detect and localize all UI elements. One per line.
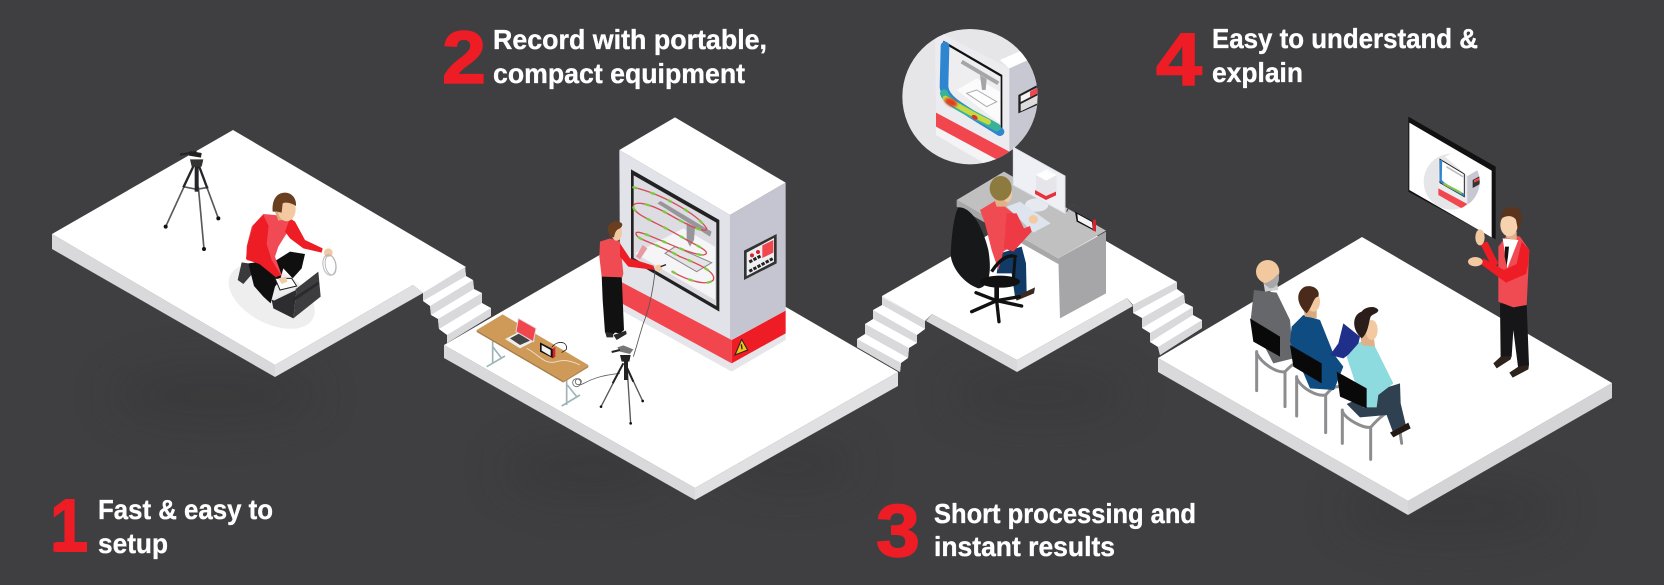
step 4 heading: explain xyxy=(1212,57,1303,88)
scene 2: recording the machine xyxy=(477,117,786,425)
audience member 3 xyxy=(1337,307,1411,459)
machine cabinet xyxy=(619,117,786,372)
platform 4 xyxy=(1158,237,1612,515)
platform 1 xyxy=(52,130,466,377)
step 2 heading: 2 xyxy=(442,16,486,99)
table with laptop and recorder xyxy=(477,314,588,406)
audience member 1 xyxy=(1250,260,1297,407)
cable coil xyxy=(321,254,338,276)
step 4 heading xyxy=(1156,18,1478,101)
thumbnail of result xyxy=(1424,154,1480,210)
desk xyxy=(957,172,1106,318)
cable xyxy=(633,272,655,357)
presenter xyxy=(1468,207,1529,378)
scene 3: processing at desk xyxy=(902,29,1106,322)
step 4 heading: Easy to understand & xyxy=(1212,23,1478,54)
step 3 heading: 3 xyxy=(876,489,920,572)
tripod with camera xyxy=(600,345,644,425)
step 2 heading: Record with portable, xyxy=(493,24,767,55)
figure shadow xyxy=(218,251,325,342)
step 1 heading: Fast & easy to xyxy=(98,494,273,525)
presentation screen xyxy=(1408,117,1496,239)
person with scanner xyxy=(599,222,666,340)
platform shadows xyxy=(110,367,1560,540)
seated person xyxy=(980,176,1038,301)
step 1 heading: setup xyxy=(98,528,168,559)
platform 3 xyxy=(882,204,1177,372)
audience member 2 xyxy=(1290,286,1343,433)
control panel xyxy=(744,234,777,280)
stairs 3 to 4 xyxy=(1133,282,1202,355)
step 3 heading xyxy=(876,489,1196,572)
monitor xyxy=(1013,147,1065,213)
step 1 heading xyxy=(50,484,273,567)
step 2 heading: compact equipment xyxy=(493,58,745,89)
step 3 heading: instant results xyxy=(934,531,1115,562)
icon: warning sign xyxy=(735,339,748,355)
step 4 heading: 4 xyxy=(1156,18,1202,101)
stairs 1 to 2 xyxy=(423,267,491,343)
magnified machine view xyxy=(902,29,1043,167)
platform 2 xyxy=(444,227,898,500)
equipment case xyxy=(272,272,321,318)
recorder device xyxy=(1067,205,1096,232)
stairs 2 to 3 xyxy=(857,296,925,372)
person kneeling xyxy=(238,193,333,303)
office chair xyxy=(951,207,1022,322)
number 1: 1 xyxy=(50,484,86,567)
keyboard xyxy=(1007,202,1051,233)
step 3 heading: Short processing and xyxy=(934,498,1196,529)
icon: tripod xyxy=(164,152,220,251)
audience laptop xyxy=(1330,323,1360,358)
scene 4: presenting to audience xyxy=(1250,117,1529,459)
coil and camera cable xyxy=(573,373,620,387)
step 2 heading xyxy=(442,16,767,99)
scene 1: technician unpacking equipment xyxy=(164,152,338,342)
machine window xyxy=(631,169,719,312)
